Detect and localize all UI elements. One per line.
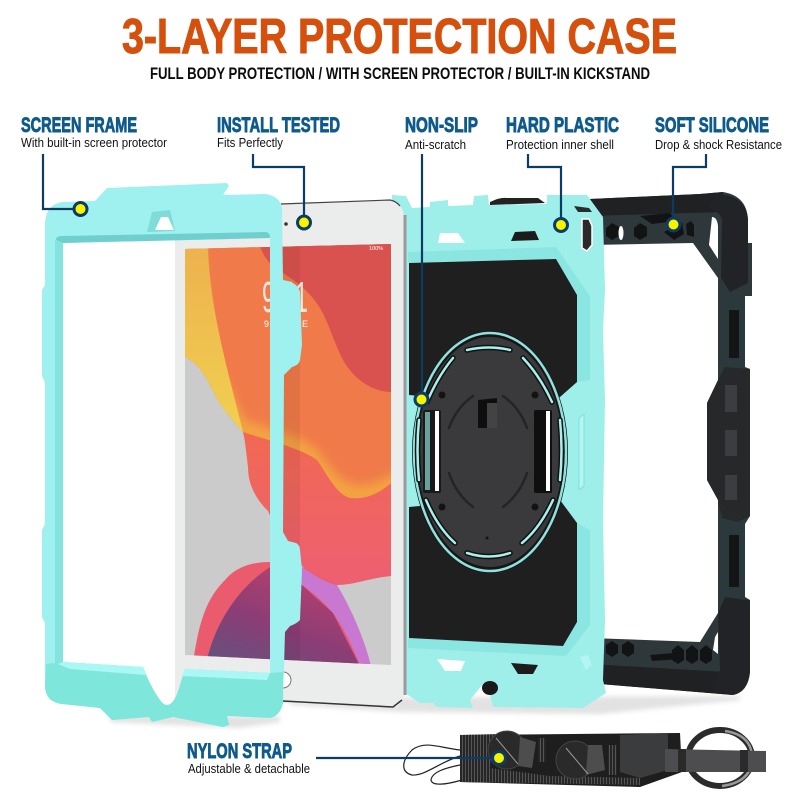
leader line <box>673 154 706 218</box>
callout: soft silicone <box>655 114 782 231</box>
heading: NYLON STRAP <box>187 740 292 763</box>
lockscreen wallpaper <box>185 235 400 670</box>
heading: SCREEN FRAME <box>21 114 137 137</box>
shaded strip <box>282 246 300 642</box>
left handle slot <box>423 410 441 493</box>
camera window <box>147 210 175 232</box>
hand grip <box>707 367 750 522</box>
curved grooves <box>449 396 527 507</box>
purple stripe <box>301 567 370 664</box>
d-ring <box>688 730 752 786</box>
heading: NON-SLIP <box>405 114 478 137</box>
marker <box>667 218 680 231</box>
bottom honeycomb vents <box>606 641 712 664</box>
marker <box>415 393 428 406</box>
description: Fits Perfectly <box>217 136 284 150</box>
panel: back layer, black soft silicone frame <box>590 192 752 695</box>
tablet top edge <box>281 200 400 206</box>
frame inner top shading <box>56 232 270 243</box>
red corner <box>258 240 391 392</box>
right handle slot <box>534 410 552 493</box>
subtitle: FULL BODY PROTECTION / WITH SCREEN PROTECTOR / BUILT-IN KICKSTAND <box>150 65 650 83</box>
strap webbing <box>460 733 682 787</box>
callout: nylon strap <box>187 740 506 776</box>
top right small cut <box>574 206 592 212</box>
leader line <box>421 154 423 394</box>
rotating pad upper <box>488 731 536 769</box>
date right fragment: E <box>302 319 308 329</box>
amber wave <box>185 240 391 498</box>
leather back, upper <box>409 259 577 397</box>
tablet bottom edge <box>283 700 402 707</box>
heading: INSTALL TESTED <box>217 114 340 137</box>
teal shell body <box>392 195 606 708</box>
rail slots <box>729 310 739 587</box>
side grip highlight <box>579 414 584 490</box>
buckle slides <box>538 738 617 775</box>
date left fragment: 9 <box>264 319 269 329</box>
callout: screen frame <box>21 114 167 216</box>
upper inner band <box>408 247 590 382</box>
marker <box>492 752 506 764</box>
marker <box>298 216 310 229</box>
heading: HARD PLASTIC <box>506 114 619 137</box>
top dark lip <box>590 192 723 216</box>
orange wave <box>200 235 400 485</box>
leader line <box>253 154 304 216</box>
description: Anti-scratch <box>405 138 466 152</box>
coral wave <box>185 240 391 585</box>
top camera slot <box>511 231 539 241</box>
callout: non-slip <box>405 114 478 406</box>
grip blocks <box>725 385 737 500</box>
top right slot <box>582 219 592 251</box>
lower inner band <box>408 523 590 656</box>
black arc slots <box>418 348 562 556</box>
lower bubble <box>192 562 372 670</box>
panel: front screen frame <box>42 183 302 727</box>
marker <box>74 202 87 216</box>
panel: middle layer, hard plastic shell <box>392 195 606 708</box>
rotating pad lower <box>556 741 605 779</box>
knob peeking above the shell <box>490 198 545 205</box>
top corner bumper <box>708 194 748 292</box>
tablet body <box>175 200 404 707</box>
wrist loops <box>404 745 462 784</box>
top left window <box>438 233 465 243</box>
teal arc slots <box>418 348 562 556</box>
right rail <box>718 284 745 613</box>
webbing tail <box>665 749 766 772</box>
top honeycomb vents <box>606 213 694 240</box>
description: Adjustable & detachable <box>188 762 310 776</box>
bottom notch knob <box>482 681 498 695</box>
screws <box>438 392 538 540</box>
frame bottom body shade <box>45 662 283 727</box>
frame inner left shading <box>55 240 63 664</box>
deep purple <box>208 567 359 664</box>
frame bottom lip highlight <box>58 662 270 680</box>
tablet metal edge <box>404 215 406 695</box>
bottom left window <box>437 659 465 671</box>
status bar: 100% <box>369 246 383 252</box>
bottom speaker cover <box>580 655 592 670</box>
kickstand slot <box>478 398 497 428</box>
home button <box>275 672 291 688</box>
rotating hand strap plate <box>412 331 568 573</box>
inner disc <box>417 337 563 567</box>
leader line <box>316 757 492 759</box>
title: 3-LAYER PROTECTION CASE <box>122 10 677 64</box>
bottom dark lip <box>590 664 733 695</box>
teal frame <box>42 183 302 727</box>
buckle <box>620 733 668 778</box>
description: Protection inner shell <box>506 138 614 152</box>
bottom corner bumper <box>712 597 750 695</box>
bottom camera slot <box>511 663 538 674</box>
leader line <box>528 154 561 219</box>
camera <box>284 222 288 226</box>
callout: hard plastic <box>506 114 619 232</box>
panel: tablet <box>175 200 405 707</box>
outer black ring <box>412 331 568 573</box>
clock: 9:41 <box>262 273 308 322</box>
description: With built-in screen protector <box>21 136 167 150</box>
silicone frame body <box>590 192 752 695</box>
marker <box>554 218 568 232</box>
yellow wave <box>185 240 243 432</box>
shadows under the case layers <box>110 696 740 728</box>
leather back, lower <box>409 500 577 646</box>
panel: nylon strap <box>404 730 766 787</box>
teal ring <box>414 333 566 571</box>
leader line <box>43 154 74 209</box>
strap ribbed edges <box>460 734 640 785</box>
speaker openings <box>618 217 718 654</box>
description: Drop & shock Resistance <box>655 138 782 152</box>
callout: install tested <box>217 114 340 229</box>
